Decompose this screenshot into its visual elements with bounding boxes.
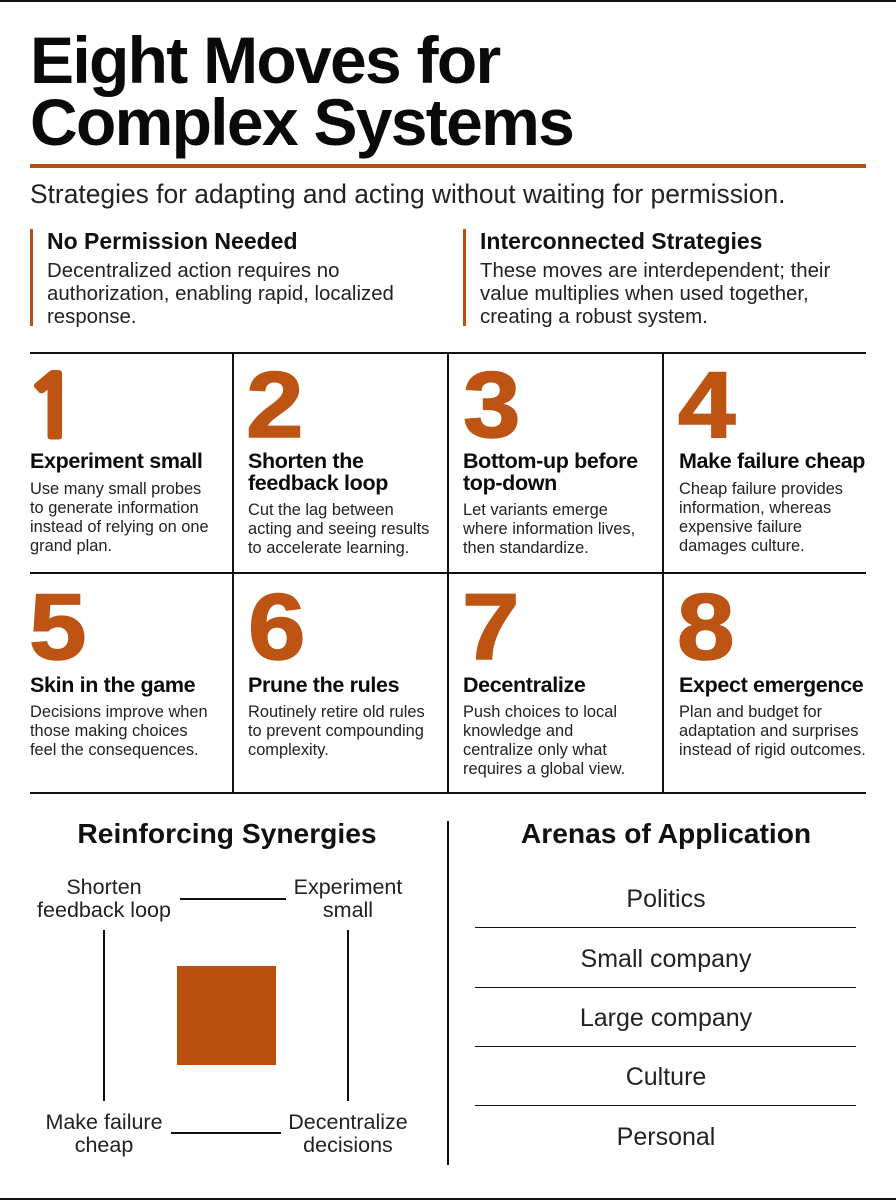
callout: no permission needed: response. (47, 306, 137, 328)
move 8: 8 (677, 574, 735, 679)
move 5: feel the consequences. (30, 741, 199, 759)
move 6: 6 (248, 574, 306, 679)
move 7: Decentralize (463, 673, 585, 697)
move 2: acting and seeing results (248, 520, 429, 538)
move 5: Decisions improve when (30, 703, 208, 721)
move 7: requires a global view. (463, 760, 625, 778)
subtitle: Strategies for adapting and acting without waiting for permission. (30, 179, 785, 209)
callout: no permission needed: Decentralized action requires no (47, 260, 339, 282)
title: Eight Moves for (30, 23, 500, 97)
move 4: expensive failure (679, 518, 802, 536)
move 8: adaptation and surprises (679, 722, 859, 740)
list: arenas of application: Large company (580, 1004, 752, 1032)
move 6: complexity. (248, 741, 329, 759)
move 8: Expect emergence (679, 673, 863, 697)
move 3: Bottom-up before (463, 449, 638, 473)
label: shorten feedback loop: Shorten (66, 875, 142, 899)
move 2: Shorten the (248, 449, 364, 473)
move 5 (29, 574, 208, 759)
list: arenas of application: Small company (581, 945, 751, 973)
list: arenas of application (475, 885, 856, 1151)
move 5: 5 (29, 574, 87, 679)
list: arenas of application: Politics (626, 885, 706, 913)
move 6: Prune the rules (248, 673, 399, 697)
move 5: those making choices (30, 722, 188, 740)
move 3: 3 (463, 352, 521, 457)
callout: no permission needed: No Permission Needed (47, 228, 298, 254)
callout: no permission needed: authorization, enabling rapid, localized (47, 283, 394, 305)
move 8: Plan and budget for (679, 703, 822, 721)
move 8: instead of rigid outcomes. (679, 741, 866, 759)
move 5: Skin in the game (30, 673, 195, 697)
callout: no permission needed (30, 228, 394, 328)
title (30, 23, 573, 159)
callout: interconnected strategies (463, 228, 830, 328)
move 7: centralize only what (463, 741, 607, 759)
label: make failure cheap (45, 1110, 163, 1157)
heading: arenas of application: Arenas of Application (521, 817, 811, 849)
move 8 (677, 574, 866, 759)
move 2 (246, 352, 429, 557)
callout: interconnected strategies: These moves are interdependent; their (480, 260, 830, 282)
label: decentralize decisions (288, 1110, 408, 1157)
move 1 (24, 365, 209, 555)
label: experiment small: Experiment (294, 875, 402, 899)
move 2: Cut the lag between (248, 501, 394, 519)
callout: interconnected strategies: creating a robust system. (480, 306, 708, 328)
callout: interconnected strategies: Interconnected Strategies (480, 228, 762, 254)
move 7: knowledge and (463, 722, 573, 740)
move 3: then standardize. (463, 539, 589, 557)
move 7: 7 (462, 574, 520, 679)
move 3: Let variants emerge (463, 501, 608, 519)
move 7: Push choices to local (463, 703, 617, 721)
move 7 (462, 574, 625, 778)
label: make failure cheap: cheap (75, 1133, 133, 1157)
title: Complex Systems (30, 85, 573, 159)
label: make failure cheap: Make failure (45, 1110, 163, 1134)
move 1: grand plan. (30, 537, 112, 555)
move 4: Cheap failure provides (679, 480, 843, 498)
move 2: feedback loop (248, 471, 388, 495)
list: arenas of application: Culture (626, 1063, 706, 1091)
label: decentralize decisions: Decentralize (288, 1110, 408, 1134)
move 3: top-down (463, 471, 557, 495)
move 2: to accelerate learning. (248, 539, 409, 557)
move 1: instead of relying on one (30, 518, 209, 536)
label: shorten feedback loop: feedback loop (37, 898, 171, 922)
move 6 (248, 574, 425, 759)
synergy diagram (37, 875, 408, 1157)
move 6: Routinely retire old rules (248, 703, 425, 721)
move 6: to prevent compounding (248, 722, 424, 740)
move 4: Make failure cheap (679, 449, 865, 473)
callout: interconnected strategies: value multiplies when used together, (480, 283, 809, 305)
label: experiment small (294, 875, 402, 922)
move 4: 4 (678, 352, 736, 457)
grid of eight moves (30, 352, 866, 794)
move 4: information, whereas (679, 499, 831, 517)
move 3 (463, 352, 638, 557)
move 3: where information lives, (463, 520, 635, 538)
move 1: Experiment small (30, 449, 202, 473)
label: experiment small: small (323, 898, 373, 922)
heading: reinforcing synergies: Reinforcing Synergies (77, 817, 377, 849)
move 2: 2 (246, 352, 304, 457)
move 1: 1 (24, 365, 81, 450)
move 1: Use many small probes (30, 480, 201, 498)
move 1: to generate information (30, 499, 199, 517)
move 4 (678, 352, 865, 555)
label: decentralize decisions: decisions (303, 1133, 393, 1157)
label: shorten feedback loop (37, 875, 171, 922)
center square (177, 966, 276, 1065)
move 4: damages culture. (679, 537, 805, 555)
list: arenas of application: Personal (617, 1123, 715, 1151)
